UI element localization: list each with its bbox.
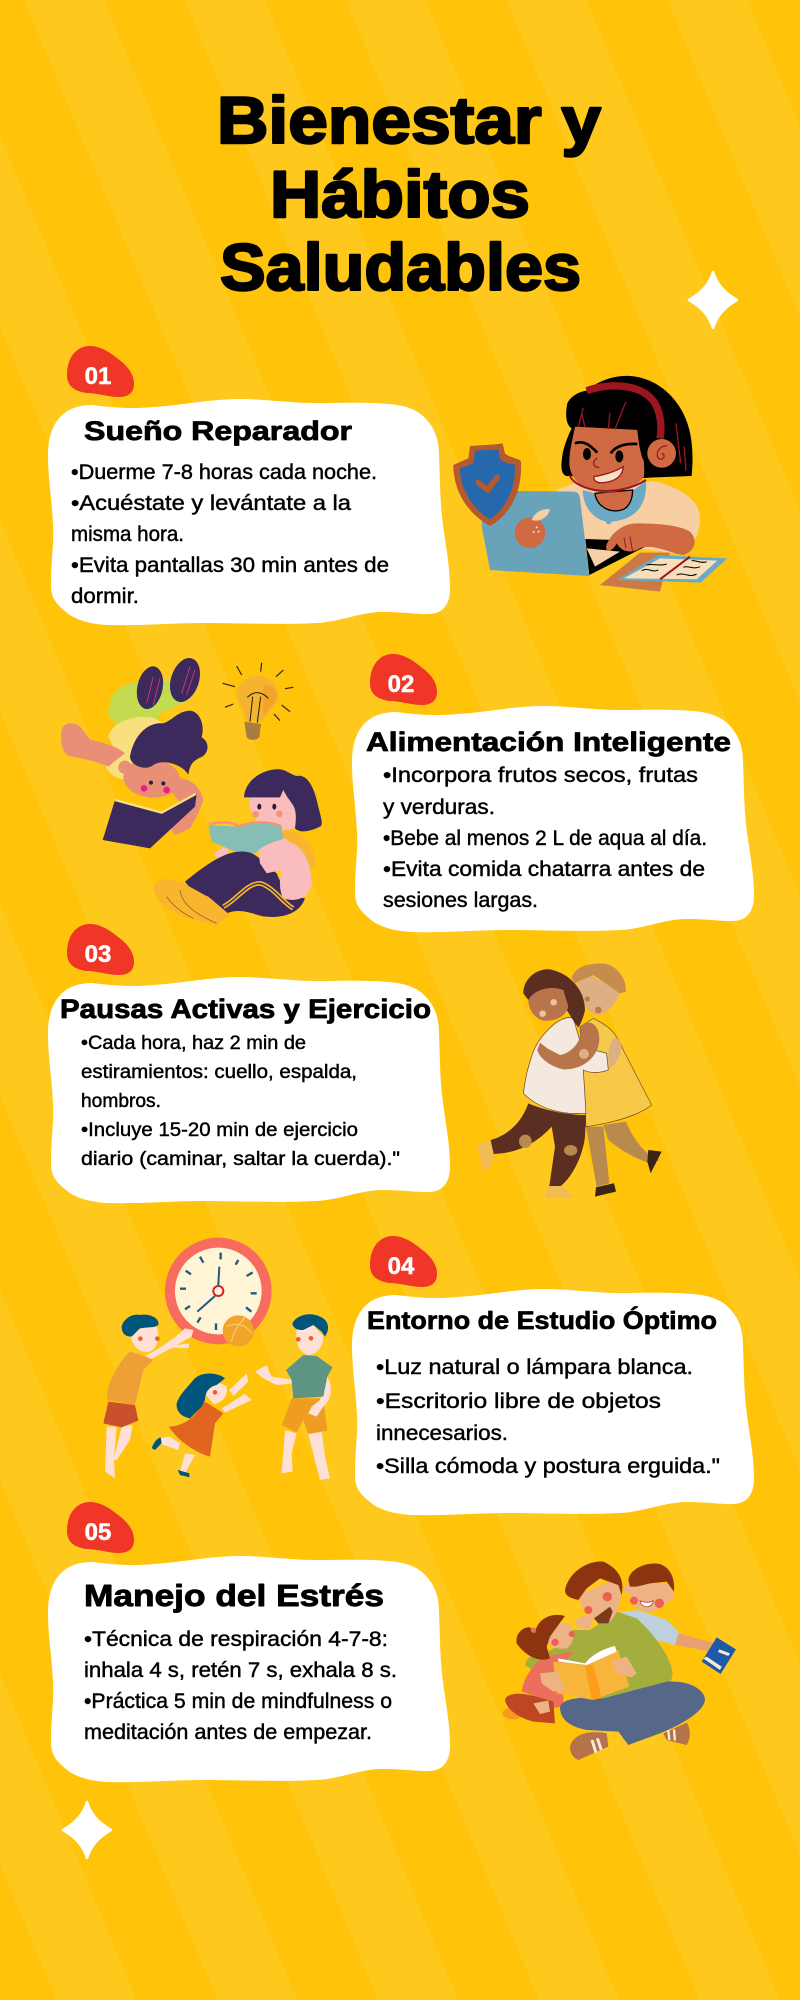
text block: alimentación: •Incorpora frutos secos, frutas [383, 764, 698, 787]
text block: manejo [84, 1628, 397, 1744]
figure: boy left [103, 1315, 193, 1478]
heading: sueño reparador: Sueño Reparador [84, 416, 353, 446]
icon: clock [165, 1238, 272, 1347]
panel: pausas activas y ejercicio [48, 924, 450, 1203]
text block: pausas: estiramientos: cuello, espalda, [81, 1061, 357, 1083]
icon: blue book [702, 1637, 736, 1674]
number badge 01: 01 [85, 363, 111, 390]
title: Hábitos [270, 157, 530, 231]
icon: sparkle top right [689, 272, 737, 328]
text block: sueño: dormir. [71, 585, 139, 608]
text block: manejo: inhala 4 s, retén 7 s, exhala 8 s. [84, 1659, 397, 1682]
text block: alimentación: sesiones largas. [383, 889, 538, 912]
number badge 03 [67, 924, 134, 975]
number badge 01 [67, 346, 134, 397]
panel: manejo del estrés [48, 1502, 450, 1782]
icon: notebook [600, 553, 727, 592]
number badge 05: 05 [85, 1519, 111, 1546]
icon: teal book [208, 822, 283, 857]
text block: pausas: •Cada hora, haz 2 min de [81, 1032, 306, 1054]
icon: sparkle bottom left [63, 1802, 111, 1858]
card background 05 [48, 1556, 450, 1782]
text block: entorno: •Escritorio libre de objetos [376, 1390, 661, 1413]
text block: manejo: meditación antes de empezar. [84, 1721, 372, 1744]
heading: entorno de estudio óptimo: Entorno de Estudio Óptimo [367, 1305, 717, 1335]
number badge 04 [370, 1236, 437, 1287]
title: Saludables [220, 230, 581, 304]
text block: entorno: •Silla cómoda y postura erguida." [376, 1455, 720, 1478]
number badge 04: 04 [388, 1253, 415, 1280]
text block: entorno [376, 1356, 720, 1478]
text block: entorno: innecesarios. [376, 1422, 508, 1445]
number badge 02: 02 [388, 671, 414, 698]
heading: manejo del estrés: Manejo del Estrés [84, 1578, 384, 1613]
text block: alimentación: •Evita comida chatarra antes de [383, 858, 705, 881]
card background 01 [48, 399, 450, 625]
illustration: two friends hugging [477, 963, 662, 1198]
text block: alimentación: •Bebe al menos 2 L de aqua al día. [383, 827, 707, 850]
icon: laptop [482, 491, 653, 576]
icon: light bulb [223, 663, 293, 740]
text block: manejo: •Técnica de respiración 4-7-8: [84, 1628, 388, 1651]
number badge 03: 03 [85, 941, 111, 968]
text block: manejo: •Práctica 5 min de mindfulness o [84, 1690, 392, 1713]
icon: shield [453, 443, 521, 526]
text block: alimentación [383, 764, 707, 912]
text block: entorno: •Luz natural o lámpara blanca. [376, 1356, 693, 1379]
illustration: girl with laptop and shield [453, 376, 727, 592]
text block: pausas: •Incluye 15-20 min de ejercicio [81, 1119, 358, 1141]
text block: sueño: •Evita pantallas 30 min antes de [71, 554, 389, 577]
title: Bienestar y [217, 83, 601, 157]
text block: pausas: hombros. [81, 1090, 161, 1112]
illustration: family reading [503, 1562, 736, 1760]
illustration: children playing with clock [103, 1238, 333, 1480]
heading: alimentación inteligente: Alimentación Inteligente [366, 727, 731, 757]
icon: dark book [103, 794, 197, 848]
text block: pausas: diario (caminar, saltar la cuerda)." [81, 1148, 400, 1170]
card background 04 [352, 1289, 754, 1515]
text block: pausas [81, 1032, 400, 1170]
card background 03 [48, 977, 450, 1203]
text block: sueño [71, 461, 389, 608]
number badge 05 [67, 1502, 134, 1553]
panel: entorno de estudio óptimo [352, 1236, 754, 1515]
heading: pausas activas y ejercicio: Pausas Activas y Ejercicio [60, 994, 431, 1024]
icon: open orange book [553, 1646, 629, 1700]
figure: boy right [255, 1314, 333, 1480]
panel: sueño reparador [48, 346, 450, 625]
illustration: children reading with light bulb [61, 654, 322, 925]
figure: girl [152, 1373, 252, 1477]
text block: sueño: misma hora. [71, 523, 184, 546]
number badge 02 [370, 654, 437, 705]
text block: sueño: •Duerme 7-8 horas cada noche. [71, 461, 377, 484]
text block: sueño: •Acuéstate y levántate a la [71, 492, 351, 515]
title [217, 83, 601, 304]
panel: alimentación inteligente [352, 654, 754, 932]
text block: alimentación: y verduras. [383, 796, 495, 819]
card background 02 [352, 706, 754, 932]
